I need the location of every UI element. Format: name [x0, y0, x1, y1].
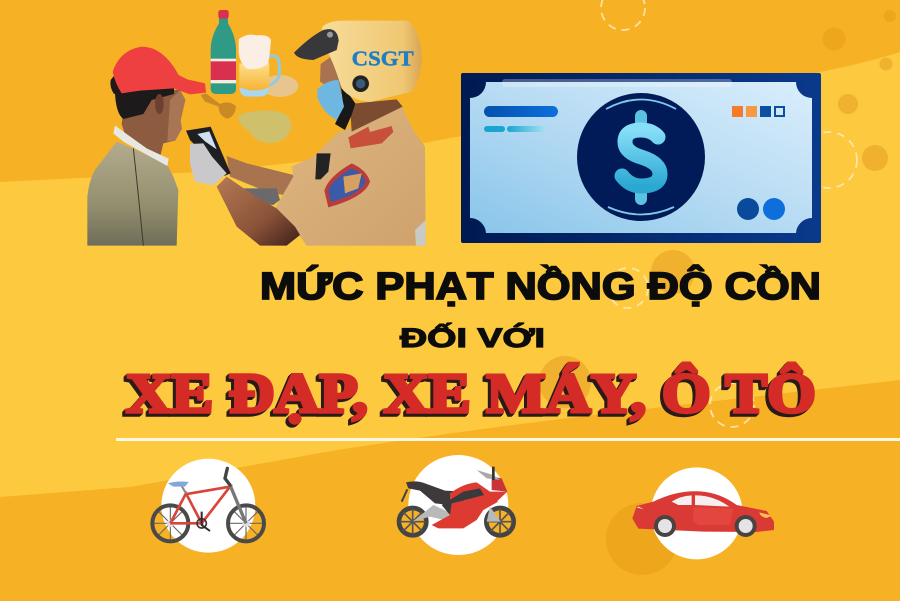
icon: car [632, 467, 774, 559]
man: red cap [110, 47, 206, 94]
officer: shoulder patch [324, 163, 370, 207]
man: hair [115, 87, 174, 119]
title line 2: ĐỐI VỚI [400, 321, 545, 353]
officer: face [320, 53, 345, 97]
officer: gray motorcycle part [243, 188, 280, 205]
title line 1: MỨC PHẠT NỒNG ĐỘ CỒN [260, 263, 821, 308]
man: head and neck [113, 90, 185, 157]
officer: neck [350, 99, 403, 132]
man: collar [113, 125, 169, 166]
icon: brown droplet [201, 93, 236, 119]
divider line [116, 438, 900, 441]
officer: face mask [317, 80, 344, 120]
officer: helmet [294, 21, 422, 102]
helmet lettering: CSGT [352, 47, 414, 71]
note: two blue dots [737, 198, 785, 220]
officer: glove [190, 143, 227, 185]
illustration: driver and traffic officer with breathalyzer [87, 10, 426, 246]
officer: forearm [217, 177, 300, 246]
title line 3: vehicles: XE ĐẠP, XE MÁY, Ô TÔ [126, 362, 816, 425]
banknote illustration [461, 73, 821, 243]
icon: motorcycle [399, 455, 514, 555]
officer: chin strap [335, 48, 355, 130]
icon: beige spill shape [262, 75, 298, 97]
breathalyzer device [186, 127, 231, 176]
icon: bicycle [152, 459, 264, 553]
officer: uniform [275, 107, 426, 246]
note: coloured squares [732, 106, 784, 117]
note: blue bars [484, 106, 558, 132]
note: light inner panel [470, 82, 812, 233]
dollar sign [622, 116, 660, 199]
officer: radio [315, 153, 331, 179]
man: jacket [87, 142, 178, 246]
officer: upper arm [227, 156, 300, 198]
officer: collar insignia [348, 126, 393, 148]
icon: bottle [211, 10, 236, 94]
icon: alcohol breath cloud [237, 111, 291, 143]
note: dollar coin [577, 93, 705, 221]
icon: beer mug [239, 35, 279, 97]
